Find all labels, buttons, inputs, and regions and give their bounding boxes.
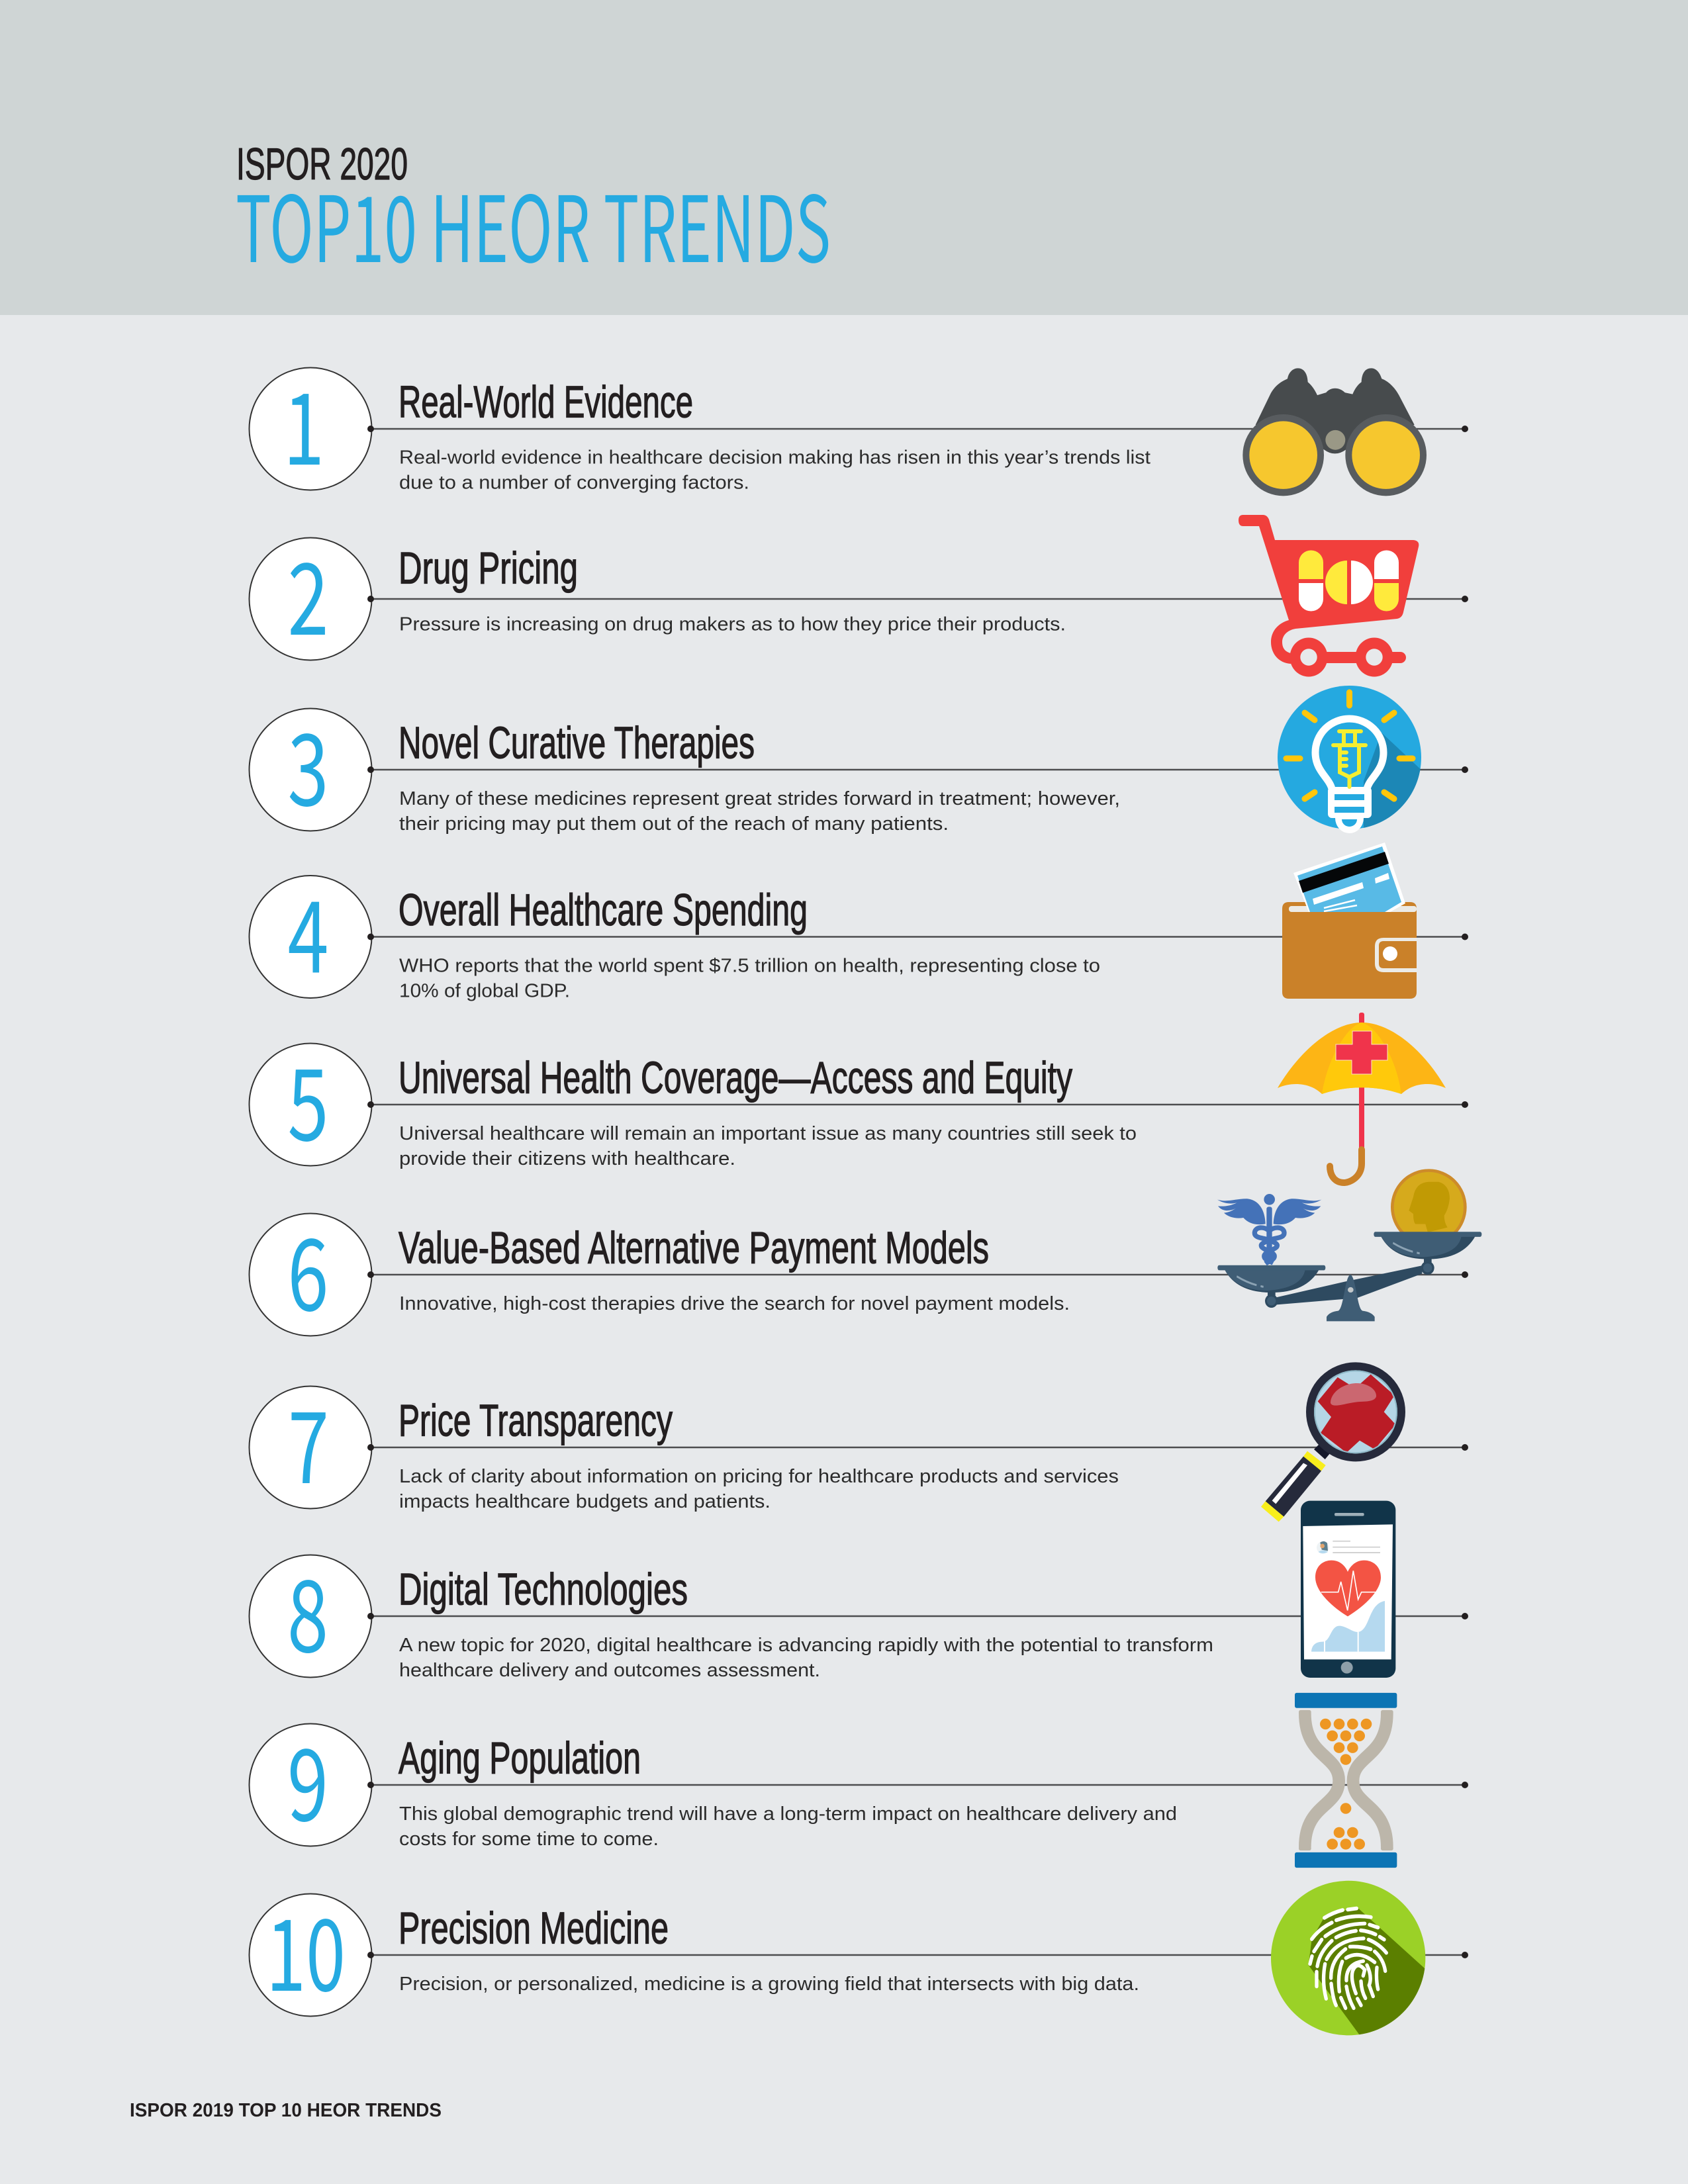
trend 7 xyxy=(249,1366,1468,1522)
heading 5: Universal Health Coverage—Access and Equity xyxy=(399,1052,1072,1103)
description 9: This global demographic trend will have a long-term impact on healthcare delivery and xyxy=(399,1803,1177,1825)
description 1: due to a number of converging factors. xyxy=(399,473,749,494)
description 8: A new topic for 2020, digital healthcare is advancing rapidly with the potential to transform xyxy=(399,1635,1213,1656)
description 1: Real-world evidence in healthcare decision making has risen in this year’s trends list xyxy=(399,447,1150,469)
description 9 xyxy=(399,1803,1177,1850)
icon: fingerprint xyxy=(1271,1881,1428,2036)
number badge 9: 9 xyxy=(287,1706,328,1850)
trend 8 xyxy=(249,1501,1468,1681)
subtitle: ISPOR 2020 xyxy=(236,139,408,189)
heading 1: Real-World Evidence xyxy=(399,377,693,428)
icon: magnifying glass over red X xyxy=(1261,1366,1401,1522)
trend 2 xyxy=(249,515,1468,676)
heading 8: Digital Technologies xyxy=(399,1565,688,1615)
icon: wallet with credit card xyxy=(1282,842,1417,999)
number badge 8 xyxy=(249,1537,374,1681)
number badge 5 xyxy=(249,1026,374,1169)
caduceus xyxy=(1217,1194,1321,1263)
icon: hourglass xyxy=(1295,1693,1397,1868)
description 8 xyxy=(399,1635,1213,1681)
description 7: Lack of clarity about information on pricing for healthcare products and services xyxy=(399,1466,1119,1487)
number badge 9 xyxy=(249,1706,374,1850)
trend 9 xyxy=(249,1693,1468,1868)
heading 10: Precision Medicine xyxy=(399,1903,669,1954)
number badge 4: 4 xyxy=(287,858,328,1002)
description 4: 10% of global GDP. xyxy=(399,981,570,1002)
coin xyxy=(1391,1169,1467,1246)
description 7: impacts healthcare budgets and patients. xyxy=(399,1491,771,1512)
title: TOP10 HEOR TRENDS xyxy=(236,156,831,289)
number badge 4 xyxy=(249,858,374,1002)
trend 10 xyxy=(249,1876,1468,2036)
description 4 xyxy=(399,956,1100,1002)
number badge 8: 8 xyxy=(287,1537,328,1681)
trend 4 xyxy=(249,842,1468,1002)
scale beam and stand xyxy=(1265,1257,1434,1321)
icon: lightbulb with syringe xyxy=(1278,686,1423,834)
number badge 3: 3 xyxy=(287,691,328,835)
number badge 6 xyxy=(249,1196,374,1340)
description 5: provide their citizens with healthcare. xyxy=(399,1148,735,1169)
number badge 1: 1 xyxy=(283,350,324,494)
heading 4: Overall Healthcare Spending xyxy=(399,885,808,935)
left pan xyxy=(1217,1265,1325,1293)
heading 9: Aging Population xyxy=(399,1733,641,1783)
description 5 xyxy=(399,1123,1137,1169)
description 10: Precision, or personalized, medicine is a growing field that intersects with big data. xyxy=(399,1974,1139,1995)
footer: ISPOR 2019 TOP 10 HEOR TRENDS xyxy=(130,2100,442,2121)
number badge 5: 5 xyxy=(287,1026,328,1169)
number badge 2: 2 xyxy=(287,520,328,664)
description 6: Innovative, high-cost therapies drive the search for novel payment models. xyxy=(399,1293,1070,1314)
description 3 xyxy=(399,788,1120,835)
description 3: their pricing may put them out of the reach of many patients. xyxy=(399,813,949,835)
icon: binoculars xyxy=(1243,368,1427,496)
description 8: healthcare delivery and outcomes assessment. xyxy=(399,1660,820,1681)
trend 6 xyxy=(249,1169,1481,1340)
coin and scale xyxy=(1217,1169,1481,1321)
heading 3: Novel Curative Therapies xyxy=(399,717,755,768)
icon: shopping cart with pills xyxy=(1239,515,1419,676)
description 4: WHO reports that the world spent $7.5 trillion on health, representing close to xyxy=(399,956,1100,977)
number badge 7: 7 xyxy=(288,1369,329,1512)
description 7 xyxy=(399,1466,1119,1512)
number badge 7 xyxy=(249,1369,374,1512)
heading 7: Price Transparency xyxy=(399,1395,673,1445)
description 3: Many of these medicines represent great strides forward in treatment; however, xyxy=(399,788,1120,809)
trend 5 xyxy=(249,1013,1468,1183)
right pan xyxy=(1374,1232,1481,1259)
trend 3 xyxy=(249,686,1468,835)
number badge 3 xyxy=(249,691,374,835)
description 1 xyxy=(399,447,1150,494)
description 5: Universal healthcare will remain an important issue as many countries still seek to xyxy=(399,1123,1137,1144)
number badge 2 xyxy=(249,520,374,664)
icon: smartphone with heart rate xyxy=(1301,1501,1395,1678)
description 9: costs for some time to come. xyxy=(399,1829,659,1850)
number badge 1 xyxy=(249,350,374,494)
icon: balance scale with caduceus and coin xyxy=(1217,1169,1481,1321)
number badge 10: 10 xyxy=(266,1876,346,2020)
header band xyxy=(0,0,1688,315)
icon: umbrella with medical cross xyxy=(1278,1013,1446,1183)
number badge 6: 6 xyxy=(287,1196,328,1340)
description 2: Pressure is increasing on drug makers as to how they price their products. xyxy=(399,614,1066,635)
heading 2: Drug Pricing xyxy=(399,543,578,594)
heading 6: Value-Based Alternative Payment Models xyxy=(399,1223,989,1273)
trend 1 xyxy=(249,350,1468,496)
